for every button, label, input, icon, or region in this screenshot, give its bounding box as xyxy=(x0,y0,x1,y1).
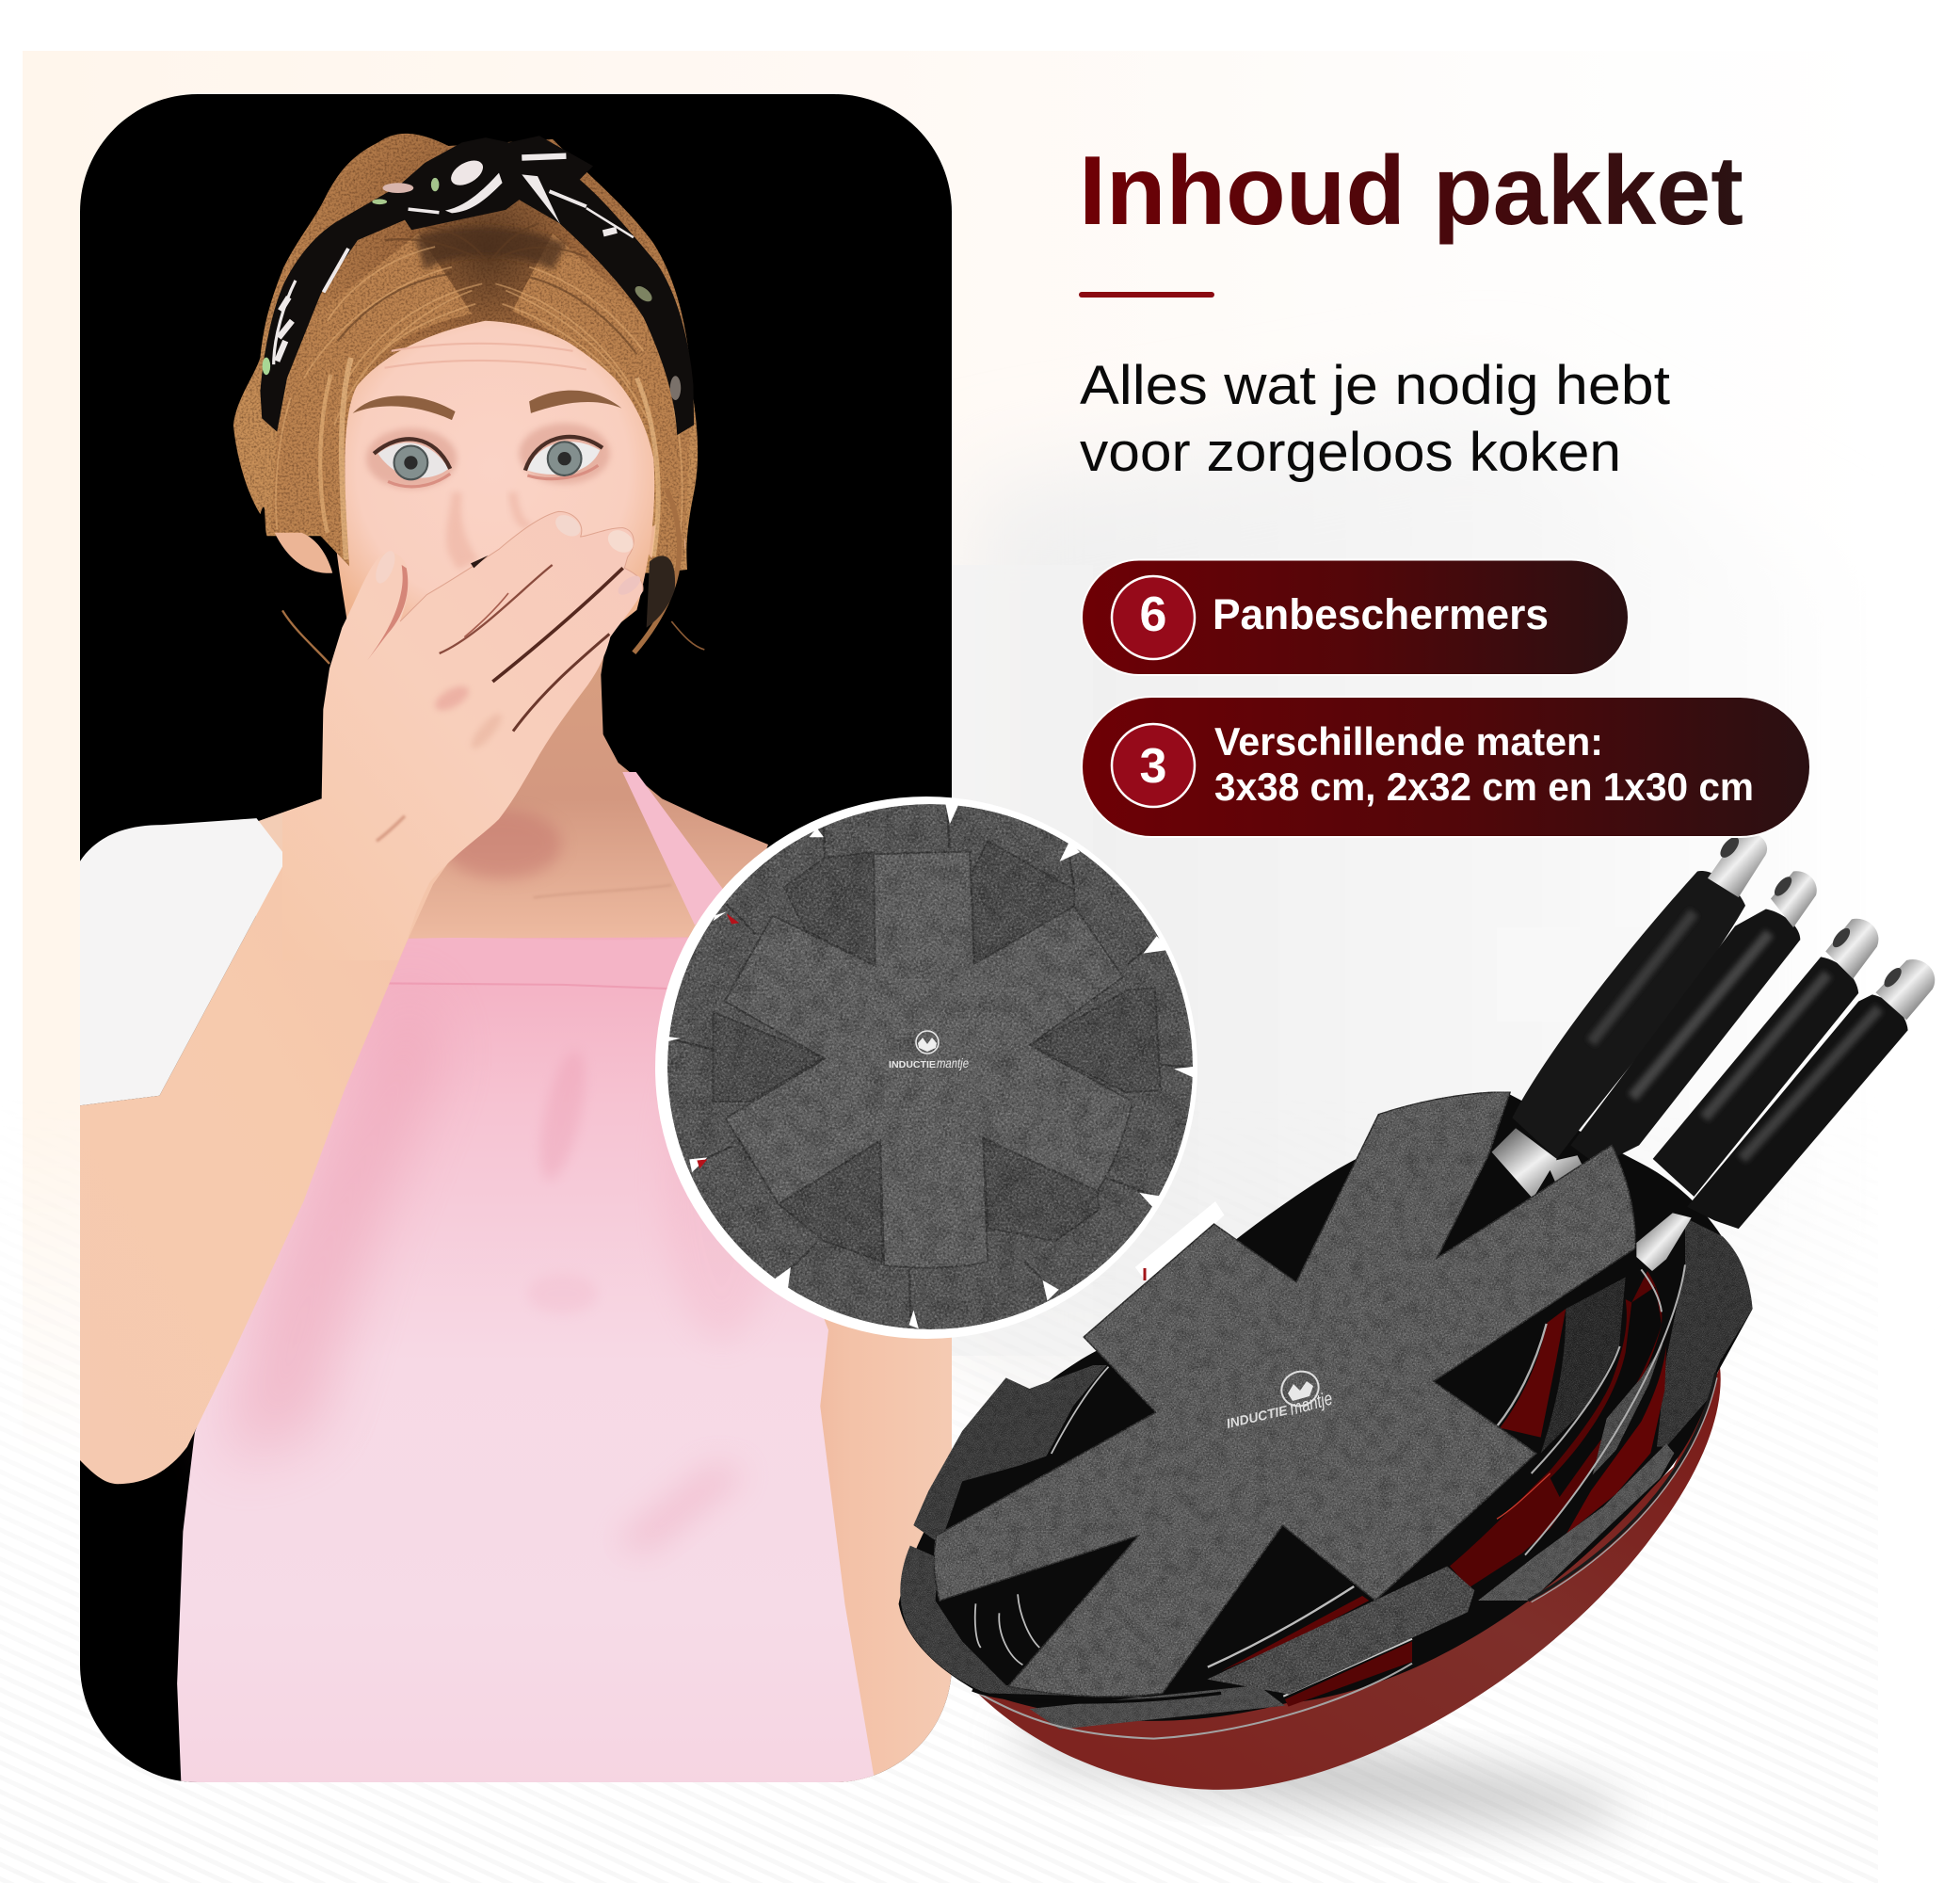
headband stripes and flowers xyxy=(263,155,681,400)
forearm xyxy=(80,864,448,1484)
disc logo: mantje xyxy=(937,1055,969,1070)
felt layers xyxy=(667,804,1194,1329)
steel collar xyxy=(1636,1213,1692,1271)
silver inner rings xyxy=(975,1367,1354,1667)
nails xyxy=(372,511,643,599)
handle two xyxy=(1570,871,1817,1166)
top star xyxy=(725,851,1133,1268)
felt strip beside lower star arm xyxy=(1207,1567,1474,1695)
pan felt logo: mantje xyxy=(1288,1389,1335,1420)
title divider xyxy=(1079,292,1214,298)
number circle 6: 6 xyxy=(1140,587,1166,642)
apron strap xyxy=(622,772,724,925)
label: Verschillende maten: xyxy=(1214,719,1603,764)
knuckle shading xyxy=(431,682,473,716)
badge: 3 verschillende maten xyxy=(1082,697,1810,837)
felt inner strip xyxy=(1541,1278,1626,1453)
handle four xyxy=(1687,959,1935,1229)
finger gaps xyxy=(440,565,623,732)
dark felt ring lower left xyxy=(900,1546,1154,1698)
top felt star xyxy=(934,1092,1635,1697)
hair mass xyxy=(233,134,698,573)
left eyebrow xyxy=(353,396,456,420)
number circle 6 xyxy=(1112,576,1195,659)
rim lines xyxy=(975,1664,1412,1739)
nose shadow xyxy=(446,492,479,570)
label xyxy=(1214,719,1754,809)
handle three xyxy=(1653,919,1878,1197)
felt strip lower xyxy=(1478,1443,1674,1601)
floral headband xyxy=(260,136,694,435)
pan interior right side xyxy=(1450,1213,1753,1602)
label: Panbeschermers xyxy=(1213,590,1549,638)
hair strands xyxy=(276,247,683,570)
dark felt ring upper left xyxy=(913,1365,1107,1544)
title: Inhoud pakket xyxy=(1079,137,1743,246)
apron top band xyxy=(417,938,491,939)
ears xyxy=(274,529,332,573)
subtitle xyxy=(1080,355,1670,483)
red interior three xyxy=(1566,1346,1666,1535)
rim line xyxy=(1528,1373,1716,1601)
background xyxy=(23,51,1544,1375)
apron bib xyxy=(177,937,876,1786)
finger outline xyxy=(400,511,643,621)
disc notches xyxy=(666,804,1197,1328)
hand covering mouth and side strands xyxy=(282,490,704,960)
badge: 6 panbeschermers xyxy=(1082,559,1629,675)
subtitle: Alles wat je nodig hebt xyxy=(1080,355,1670,416)
forehead creases xyxy=(385,344,586,369)
disc logo xyxy=(889,1031,969,1070)
apron shading xyxy=(221,983,780,1552)
hair fringe xyxy=(270,233,472,566)
label: 3x38 cm, 2x32 cm en 1x30 cm xyxy=(1214,764,1754,809)
face xyxy=(330,321,654,650)
number circle 3 xyxy=(1112,724,1195,807)
head: hair, face, headband xyxy=(233,134,698,650)
red interior two xyxy=(1450,1271,1662,1588)
ring seams xyxy=(669,808,1194,1325)
ground shadow under pan xyxy=(1005,1705,1631,1844)
silver lines xyxy=(1497,1264,1685,1555)
thumb shadow xyxy=(367,565,408,661)
bottom felt band xyxy=(1030,1685,1285,1730)
neck and chest xyxy=(256,656,768,939)
dark hair at part xyxy=(415,227,566,270)
product disc: stacked felt protector with white ring xyxy=(655,797,1197,1339)
number circle 3: 3 xyxy=(1140,739,1166,794)
thin red band xyxy=(1221,1596,1369,1671)
eye socket shadows xyxy=(366,428,457,489)
red interior one xyxy=(1500,1309,1566,1438)
star edge red trim xyxy=(1143,1268,1147,1280)
body in lower photo coordinates xyxy=(80,772,956,1789)
pan felt logo xyxy=(1225,1365,1335,1431)
inner dark pan stack xyxy=(899,1094,1752,1721)
right eyebrow xyxy=(529,391,621,413)
right eye xyxy=(525,437,602,479)
white t-shirt xyxy=(80,818,287,1105)
hand xyxy=(282,511,643,960)
black band xyxy=(1550,1287,1662,1497)
red pan body xyxy=(974,1368,1721,1790)
white sliver artifact xyxy=(1135,1201,1225,1285)
handle one xyxy=(1512,832,1767,1159)
middle wedges xyxy=(714,841,1161,1262)
steel collars xyxy=(1492,1128,1584,1199)
photo panel: surprised woman in apron xyxy=(80,94,956,1789)
side hair strands xyxy=(282,490,704,664)
product: nested red pans with felt protectors xyxy=(899,832,1935,1790)
left eye xyxy=(374,439,450,487)
subtitle: voor zorgeloos koken xyxy=(1080,422,1621,483)
pan interior left and bottom xyxy=(900,1365,1412,1739)
pan felt logo: INDUCTIE xyxy=(1225,1402,1290,1431)
background diagonal stripe texture xyxy=(0,1083,1878,1883)
dark felt on right xyxy=(1657,1217,1753,1447)
disc logo: INDUCTIE xyxy=(889,1059,936,1070)
right arm xyxy=(820,1318,952,1782)
felt strip mid xyxy=(1593,1344,1663,1475)
